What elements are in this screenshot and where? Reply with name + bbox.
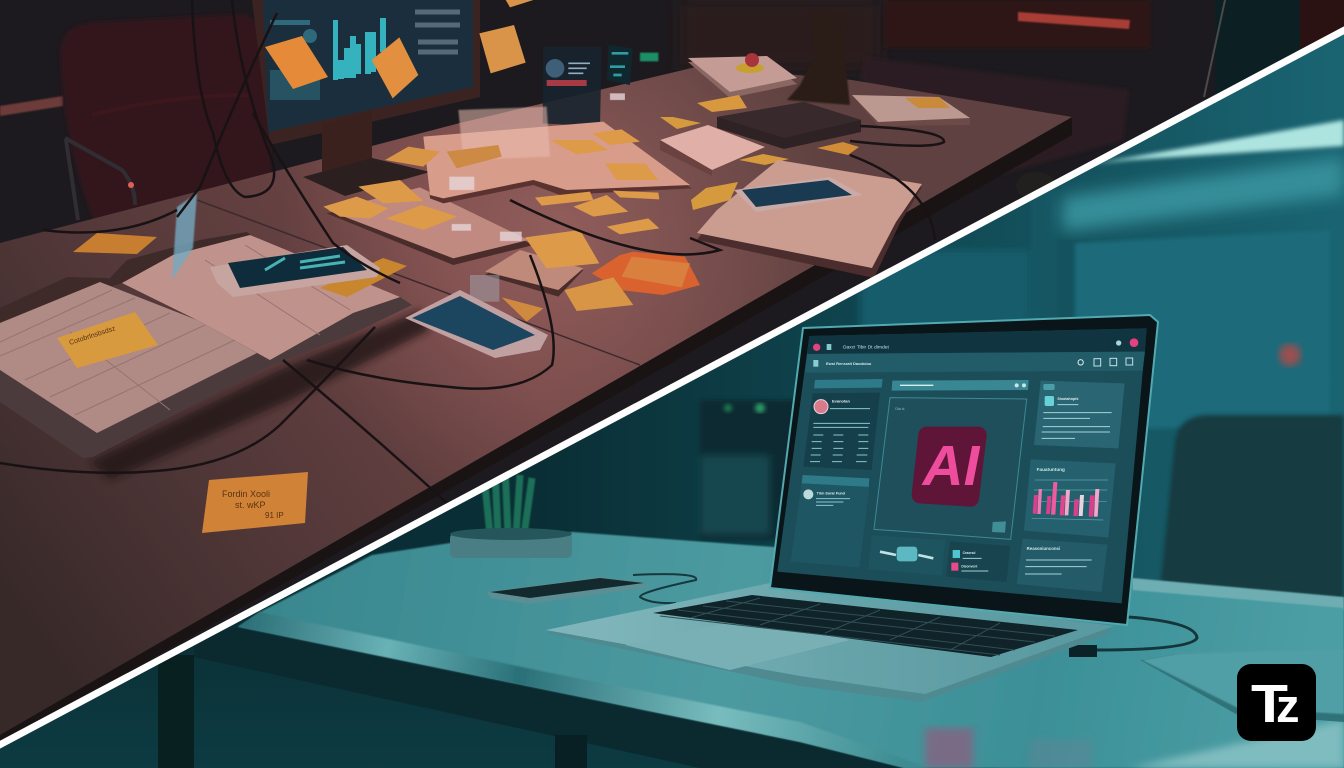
canvas button <box>992 521 1006 533</box>
open center book <box>423 107 692 203</box>
monitor <box>252 0 480 196</box>
bottom legend card: Craorsd <box>963 551 975 555</box>
book covers <box>0 232 252 322</box>
keyboard <box>653 595 1078 657</box>
nav bar text and icons: Ewsi Renrzait Daoduiou <box>826 361 872 366</box>
lit desk corner <box>1130 720 1344 768</box>
white top book <box>688 56 797 98</box>
sticky top left <box>73 233 157 254</box>
red wall light <box>1018 12 1130 29</box>
sticky on left notebook <box>57 312 158 368</box>
desk phone <box>487 577 647 604</box>
hologram left <box>172 193 197 280</box>
back cable loop <box>850 126 944 146</box>
sticky on desk: st. wKP <box>235 500 266 510</box>
laptop <box>546 315 1158 702</box>
trackpad <box>626 627 849 670</box>
logo: Tz badge: z <box>1276 679 1300 732</box>
profile header <box>814 379 883 388</box>
nav bar <box>805 352 1145 373</box>
monitor chart bars <box>333 18 386 80</box>
misc stickies right <box>660 117 859 210</box>
profile card: Evanotan <box>832 398 850 403</box>
lower left header <box>802 475 869 487</box>
desk lip highlights <box>238 612 930 768</box>
right info card <box>1034 381 1125 448</box>
bar chart card <box>1024 459 1116 537</box>
sticky on desk: Fordin Xooli <box>222 489 270 499</box>
page rules <box>0 245 350 415</box>
orange sticky notes <box>323 0 700 322</box>
plant <box>450 465 572 558</box>
floor under desk <box>0 703 606 768</box>
pink desk lighting <box>0 66 1072 735</box>
phone two <box>405 290 548 358</box>
canvas label: Dia ic <box>895 407 905 411</box>
nav bar text and icons <box>813 358 1133 367</box>
monitor left dashboard <box>270 20 320 100</box>
desk shadow side <box>0 117 1072 745</box>
top bar <box>807 328 1147 354</box>
floating hologram panel <box>543 47 602 127</box>
sticky on left notebook: Cotobrlnsbsdsz <box>68 325 117 347</box>
monitor side list <box>415 12 460 52</box>
top bar text <box>813 338 1138 351</box>
sticky under phone <box>320 258 407 297</box>
right info card: Sinotahnphi <box>1057 397 1078 401</box>
laptop screen UI <box>777 328 1147 603</box>
desk apron <box>194 627 904 768</box>
chair knob right <box>1016 172 1056 200</box>
phone cable <box>633 574 696 603</box>
top bar text: Oaxci Tibir Dt dimdet <box>843 345 890 351</box>
bottom legend card <box>946 541 1010 582</box>
second desk leg <box>555 735 587 768</box>
laptop lid <box>770 315 1158 625</box>
white loose book <box>660 125 765 176</box>
logo: Tz badge <box>1237 664 1316 741</box>
right page <box>122 235 400 360</box>
red indicator light <box>1279 344 1301 366</box>
small stacked book <box>485 250 583 297</box>
dark book <box>717 102 861 149</box>
sticky on desk <box>202 472 308 533</box>
right back notebook <box>852 95 970 126</box>
book page edges <box>0 297 412 458</box>
desk back rail right <box>1132 578 1344 610</box>
right notebook <box>697 160 922 278</box>
desk leg <box>158 655 194 768</box>
bottom text card: Reasoniunconsi <box>1027 546 1060 551</box>
bottom text card <box>1017 539 1107 592</box>
tangled cables <box>0 0 935 503</box>
hologram fragments <box>449 93 625 302</box>
center desk items <box>323 0 700 322</box>
left page <box>0 282 257 433</box>
shadow under left notebook <box>90 310 430 480</box>
notepad <box>1140 650 1344 722</box>
charging cable <box>1069 617 1197 657</box>
monitor sticky left <box>265 36 328 89</box>
ceiling light strip <box>1092 120 1344 164</box>
office chair <box>60 14 272 225</box>
search bar <box>892 380 1029 391</box>
right phone <box>734 177 863 212</box>
bottom legend card: Disonvent <box>961 565 978 569</box>
chair <box>1160 415 1344 605</box>
soft upper light <box>1062 157 1344 232</box>
red reflection on desk <box>925 728 1092 768</box>
bottom small widget <box>868 535 945 576</box>
sticky near top book <box>697 95 747 112</box>
bar chart card: Fauatuntung <box>1037 467 1065 472</box>
wall panels <box>700 170 1330 540</box>
laptop base <box>548 630 1113 702</box>
back wall shading <box>680 0 1344 175</box>
statue <box>787 10 850 105</box>
main canvas card <box>874 398 1027 539</box>
left wall strip <box>0 96 63 116</box>
small cyan holograms <box>607 45 658 85</box>
phone one <box>210 245 380 297</box>
ornament <box>736 53 764 73</box>
AI logo: AI <box>921 435 981 498</box>
desk surface <box>0 66 1072 735</box>
lower left card: Trim Sorar Fund <box>817 491 845 495</box>
left open notebook <box>0 232 412 458</box>
lower left card <box>791 483 869 567</box>
logo: Tz badge: T <box>1251 674 1288 734</box>
green lights <box>724 403 765 413</box>
lower notebook <box>327 187 533 265</box>
profile card <box>803 393 880 470</box>
sticky on desk: 91 IP <box>265 511 284 520</box>
desk top <box>238 532 1344 768</box>
desk seam <box>197 200 640 365</box>
